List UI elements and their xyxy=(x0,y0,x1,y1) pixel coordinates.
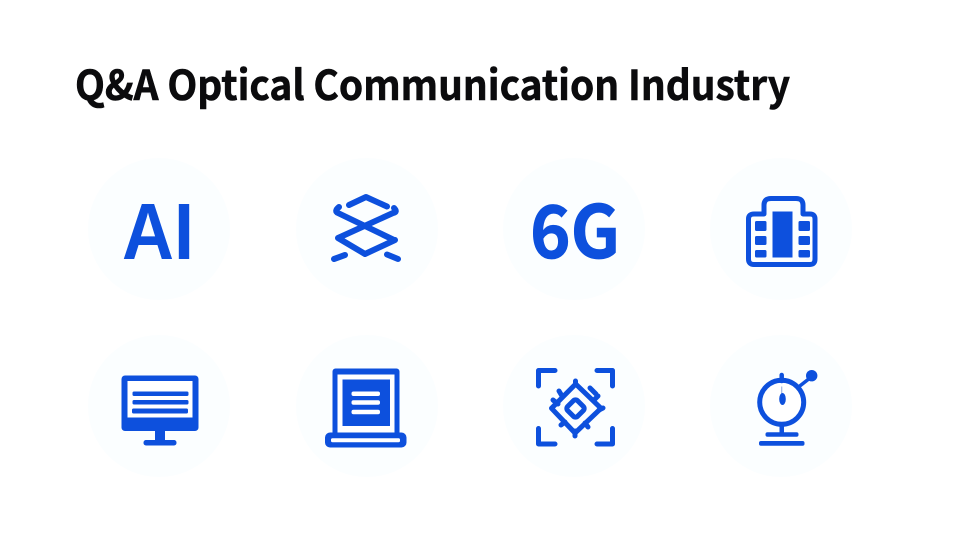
title: Q&A Optical Communication Industry xyxy=(75,52,790,112)
icon: 6G xyxy=(503,158,645,300)
icon: AI xyxy=(88,158,230,300)
icon: chip in scan frame xyxy=(503,335,645,477)
icon: monitor xyxy=(88,335,230,477)
icon: optical sensor dial xyxy=(710,335,852,477)
icon: crossed optical links xyxy=(296,158,438,300)
icon: 6G: 6G xyxy=(530,174,620,280)
icon: laptop xyxy=(296,335,438,477)
icon: AI: AI xyxy=(122,187,194,276)
icon: building xyxy=(710,158,852,300)
